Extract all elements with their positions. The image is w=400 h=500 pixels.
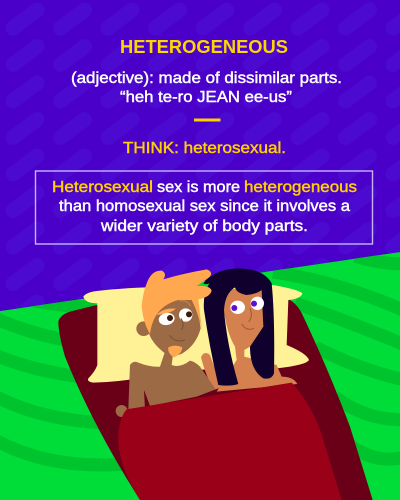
bed <box>58 300 373 500</box>
callout box: wider variety of body parts. <box>100 218 308 235</box>
man's left eye <box>158 311 176 327</box>
woman's right eye <box>251 297 264 310</box>
woman's hair <box>203 268 274 386</box>
callout box: sex is more <box>157 179 240 196</box>
callout box: heterogeneous <box>244 179 357 196</box>
raised hand <box>201 353 222 390</box>
man's hand <box>116 405 128 417</box>
man's nose and mouth <box>169 318 185 341</box>
man's head <box>136 298 201 355</box>
man's right eyebrow <box>179 300 191 306</box>
yellow divider <box>194 118 220 122</box>
definition <box>71 70 342 106</box>
title: HETEROGENEOUS <box>120 37 288 57</box>
woman's left eye <box>230 301 245 314</box>
man's goatee <box>168 346 182 357</box>
woman's nose and mouth <box>242 308 254 329</box>
man's eyebrow <box>157 308 176 315</box>
blanket <box>118 383 342 500</box>
callout box: than homosexual sex since it involves a <box>59 198 350 215</box>
woman's body and face <box>217 287 297 392</box>
pillow <box>83 285 309 383</box>
definition: (adjective): made of dissimilar parts. <box>71 70 342 87</box>
definition: “heh te-ro JEAN ee-us” <box>120 89 292 106</box>
green ground with wavy bands <box>0 252 400 500</box>
man's torso and arms <box>128 352 216 409</box>
callout box: Heterosexual <box>52 179 153 196</box>
illustration: couple in bed <box>58 268 373 500</box>
think line: THINK: heterosexual. <box>123 140 286 157</box>
callout box <box>36 171 372 244</box>
man's right eye <box>179 308 192 322</box>
man's hair <box>142 269 212 334</box>
